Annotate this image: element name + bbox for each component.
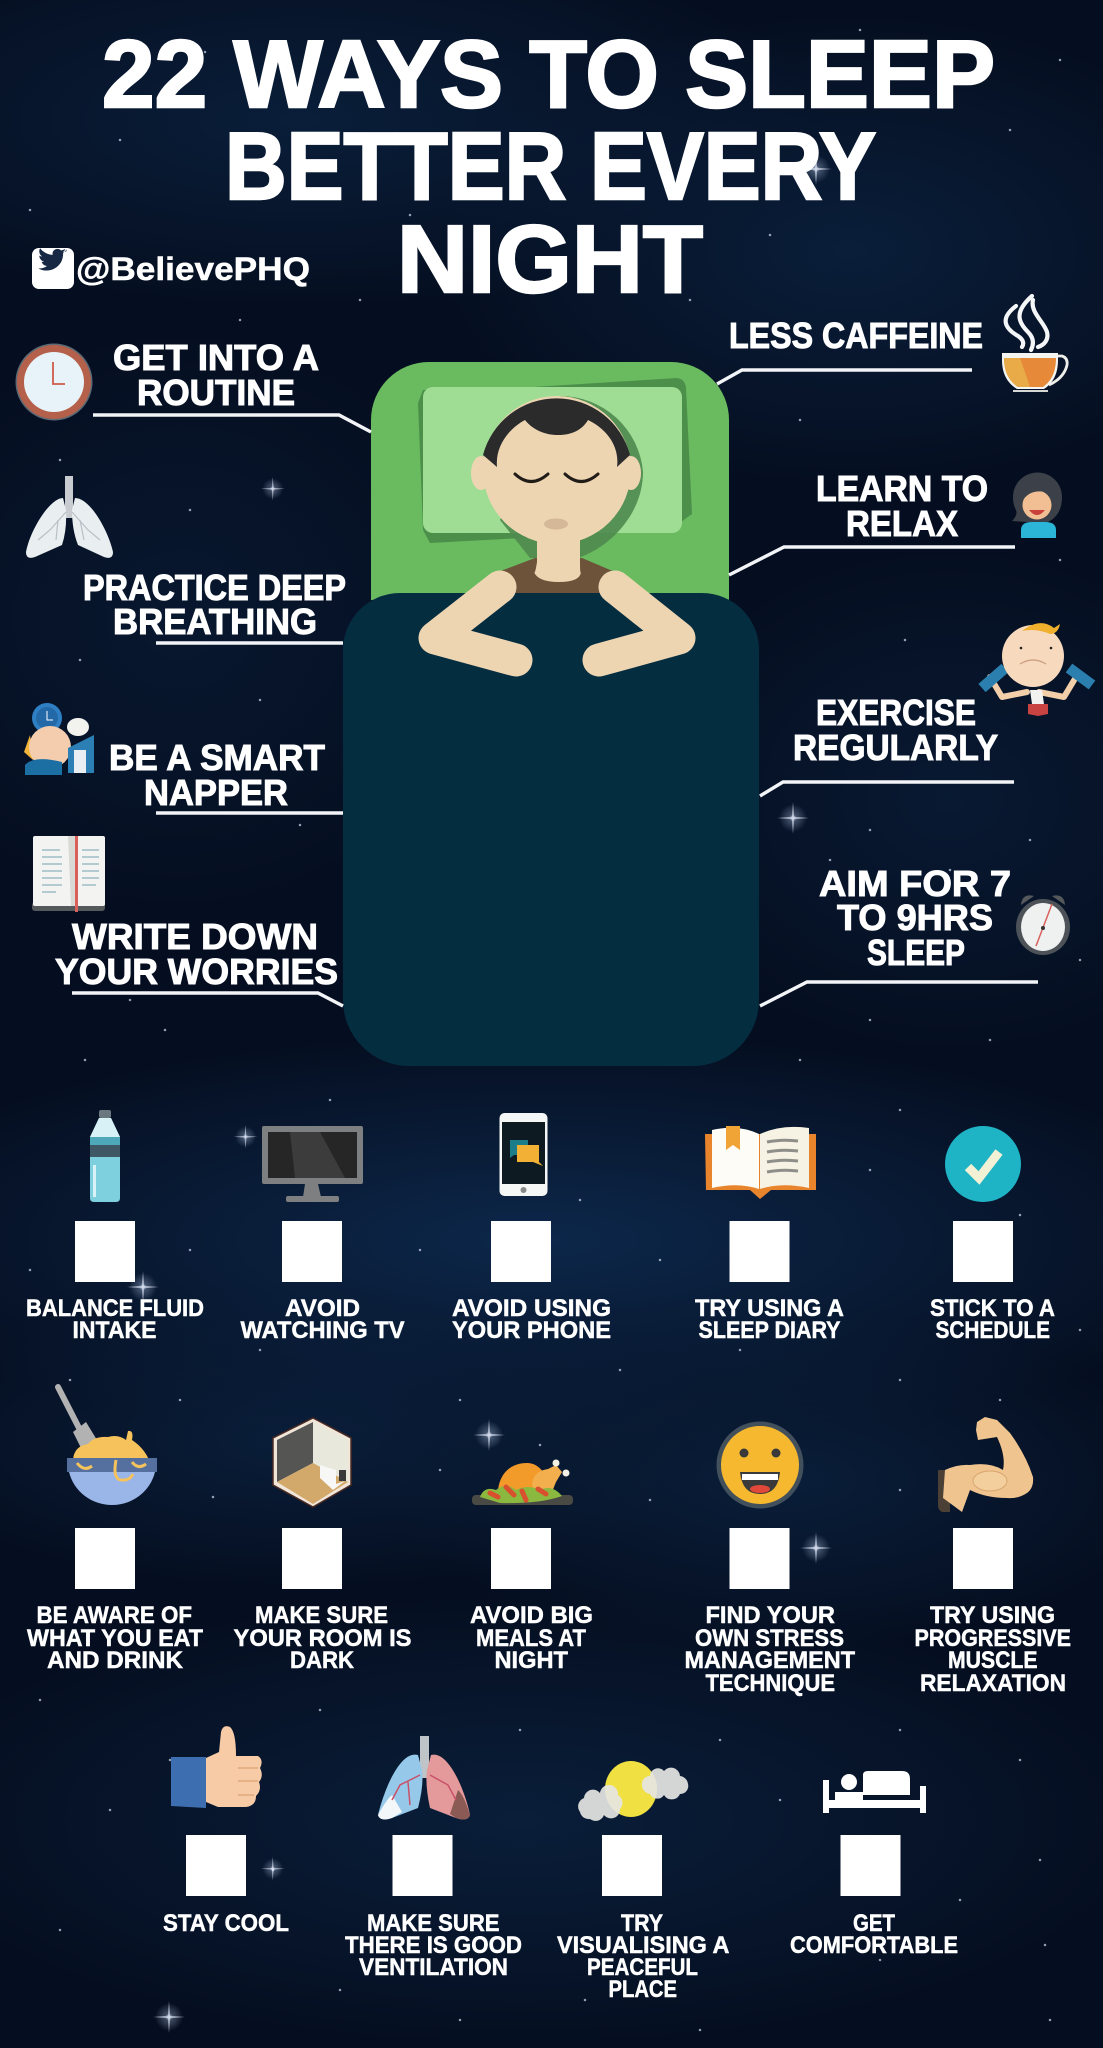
tip: stick to a schedule: SCHEDULE (936, 1317, 1050, 1344)
twitter handle (32, 248, 310, 289)
tip: try using progressive muscle relaxation: TRY USING (930, 1602, 1055, 1629)
icon: water bottle (90, 1110, 120, 1202)
callout: be a smart napper: NAPPER (144, 772, 288, 813)
callout: aim for 7 to 9hrs sleep: SLEEP (867, 932, 965, 973)
icon: white lungs (26, 476, 113, 558)
checkbox (282, 1221, 342, 1282)
checkbox (730, 1221, 790, 1282)
callout: write down your worries (32, 836, 343, 1006)
icon: smiling face (716, 1422, 804, 1508)
tip: try using progressive muscle relaxation (914, 1417, 1071, 1697)
tip: stick to a schedule (930, 1126, 1055, 1344)
callout: less caffeine (717, 296, 1067, 391)
icon: roast turkey (472, 1460, 573, 1505)
icon: relaxed woman (1012, 472, 1062, 538)
shirt (498, 558, 615, 593)
tip: get comfortable (790, 1771, 958, 1959)
checkbox (602, 1835, 662, 1896)
title: 22 WAYS TO SLEEP (102, 21, 995, 128)
checkbox (75, 1221, 135, 1282)
tip: balance fluid intake: BALANCE FLUID (26, 1295, 204, 1322)
checkbox (953, 1528, 1013, 1589)
tip: stick to a schedule: STICK TO A (930, 1295, 1055, 1322)
title: BETTER EVERY (225, 113, 876, 220)
icon: pasta bowl with fork (58, 1387, 157, 1505)
tip: make sure there is good ventilation: MAKE SURE (367, 1910, 500, 1937)
icon: check mark (945, 1126, 1021, 1202)
icon: wall clock (16, 344, 92, 420)
icon: napping person (24, 703, 94, 775)
callout: exercise regularly (760, 623, 1092, 796)
checkbox (392, 1835, 452, 1896)
callout: get into a routine (16, 337, 371, 432)
tip: try using a sleep diary: SLEEP DIARY (698, 1317, 840, 1344)
title (102, 21, 995, 313)
callout: exercise regularly: REGULARLY (793, 727, 998, 768)
tip: avoid big meals at night: MEALS AT (476, 1625, 586, 1652)
head shadow (500, 396, 643, 558)
callout: less caffeine: LESS CAFFEINE (729, 315, 983, 356)
tip: avoid using your phone: YOUR PHONE (452, 1317, 611, 1344)
tip: try visualising a peaceful place: TRY (621, 1910, 663, 1937)
tip: try visualising a peaceful place: PLACE (608, 1976, 677, 2003)
tip: get comfortable: COMFORTABLE (790, 1932, 958, 1959)
callout: aim for 7 to 9hrs sleep: TO 9HRS (837, 897, 993, 938)
tip: find your own stress management technique: FIND YOUR (706, 1602, 835, 1629)
twitter handle: @BelievePHQ (76, 251, 310, 287)
tip: avoid watching tv: WATCHING TV (240, 1317, 404, 1344)
bed headboard (371, 362, 729, 600)
icon: television (262, 1126, 363, 1202)
neck (534, 535, 581, 582)
checkbox (491, 1221, 551, 1282)
tip: try visualising a peaceful place: PEACEFUL (587, 1954, 698, 1981)
tip: make sure your room is dark: MAKE SURE (255, 1602, 388, 1629)
checkbox (953, 1221, 1013, 1282)
tip: avoid big meals at night: AVOID BIG (470, 1602, 593, 1629)
callout: get into a routine: GET INTO A (113, 337, 319, 378)
head (471, 396, 641, 544)
tip: avoid big meals at night: NIGHT (494, 1647, 568, 1674)
icon: thumbs up (171, 1726, 262, 1808)
illustration: sleeping person in bed (343, 362, 759, 1066)
tip: stay cool (163, 1726, 289, 1937)
checkbox (282, 1528, 342, 1589)
callout: practice deep breathing (26, 476, 346, 643)
callout: exercise regularly: EXERCISE (816, 692, 976, 733)
icon: smartphone (500, 1113, 548, 1196)
icon: flexed bicep (938, 1417, 1033, 1512)
icon: open book (705, 1126, 816, 1199)
callout: learn to relax: LEARN TO (816, 468, 988, 509)
tip: avoid watching tv: AVOID (285, 1295, 360, 1322)
tip: be aware of what you eat and drink: AND DRINK (47, 1647, 184, 1674)
tip: make sure there is good ventilation: THERE IS GOOD (345, 1932, 522, 1959)
callout: learn to relax (729, 468, 1062, 575)
tip: find your own stress management technique (684, 1422, 855, 1697)
tip: avoid using your phone (452, 1113, 611, 1344)
tip: make sure your room is dark: YOUR ROOM IS (234, 1625, 412, 1652)
checkbox (75, 1528, 135, 1589)
icon: person in bed (823, 1771, 926, 1813)
tip: find your own stress management technique: MANAGEMENT (684, 1647, 855, 1674)
tip: get comfortable: GET (853, 1910, 895, 1937)
icon: hot tea (1002, 296, 1067, 391)
icon: moon and clouds (578, 1761, 688, 1821)
callout: get into a routine: ROUTINE (137, 372, 295, 413)
icon: coloured lungs (378, 1736, 470, 1819)
checkbox (491, 1528, 551, 1589)
callout: aim for 7 to 9hrs sleep: AIM FOR 7 (819, 863, 1011, 904)
callout: practice deep breathing: PRACTICE DEEP (83, 567, 346, 608)
tip: try using a sleep diary (695, 1126, 844, 1344)
icon: open notebook (32, 836, 105, 912)
tip: make sure your room is dark: DARK (290, 1647, 355, 1674)
tip: try using progressive muscle relaxation: PROGRESSIVE (914, 1625, 1071, 1652)
icon: alarm clock (1016, 895, 1070, 955)
callout: practice deep breathing: BREATHING (113, 601, 317, 642)
tip: be aware of what you eat and drink (27, 1387, 203, 1674)
tip: avoid using your phone: AVOID USING (452, 1295, 611, 1322)
tip: avoid watching tv (240, 1126, 404, 1344)
tip: make sure there is good ventilation (345, 1736, 522, 1981)
icon: dark room (273, 1418, 351, 1507)
tip: be aware of what you eat and drink: WHAT YOU EAT (27, 1625, 203, 1652)
tip: balance fluid intake (26, 1110, 204, 1344)
checkbox (730, 1528, 790, 1589)
tip: try using progressive muscle relaxation: MUSCLE (948, 1647, 1038, 1674)
callout: learn to relax: RELAX (846, 503, 958, 544)
tip: try using a sleep diary: TRY USING A (695, 1295, 844, 1322)
pillow (418, 378, 692, 543)
checkbox (840, 1835, 900, 1896)
callout: aim for 7 to 9hrs sleep (760, 863, 1070, 1006)
blanket (343, 593, 759, 1066)
tip: try visualising a peaceful place (557, 1761, 730, 2003)
tip: be aware of what you eat and drink: BE AWARE OF (36, 1602, 192, 1629)
callout: be a smart napper (24, 703, 343, 813)
tip: avoid big meals at night (470, 1460, 593, 1674)
tip: make sure there is good ventilation: VENTILATION (359, 1954, 508, 1981)
tip: find your own stress management technique: OWN STRESS (695, 1625, 844, 1652)
arms (435, 587, 679, 660)
tip: balance fluid intake: INTAKE (72, 1317, 156, 1344)
tip: make sure your room is dark (234, 1418, 412, 1674)
tip: stay cool: STAY COOL (163, 1910, 289, 1937)
callout: write down your worries: WRITE DOWN (72, 916, 318, 957)
checkbox (186, 1835, 246, 1896)
tip: try using progressive muscle relaxation: RELAXATION (920, 1670, 1066, 1697)
tip: try visualising a peaceful place: VISUALISING A (557, 1932, 730, 1959)
callout: write down your worries: YOUR WORRIES (55, 951, 338, 992)
icon: man lifting dumbbells (982, 623, 1092, 716)
tip: find your own stress management technique: TECHNIQUE (706, 1670, 835, 1697)
title: NIGHT (397, 206, 703, 313)
callout: be a smart napper: BE A SMART (109, 737, 325, 778)
